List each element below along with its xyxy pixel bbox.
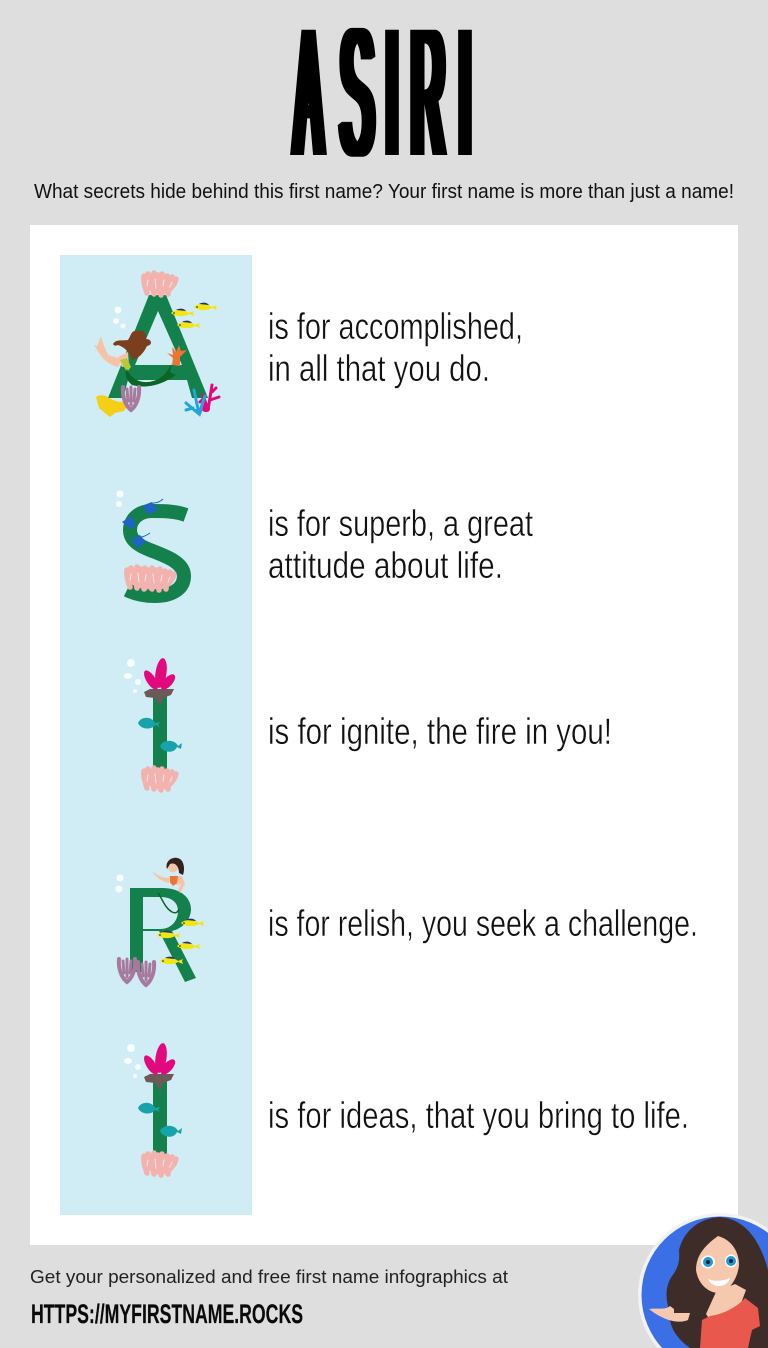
text: S line: is for superb, a great (268, 503, 534, 544)
text: S line (268, 503, 534, 586)
footer text: Get your personalized and free first name infographics at (30, 1266, 508, 1287)
panel: white card (30, 225, 738, 1245)
icon: letter S with blue fish and coral (116, 490, 186, 596)
panel: light blue letter strip (60, 255, 252, 1215)
icon: letter I with fountain and teal fish (124, 657, 182, 790)
text: S line: attitude about life. (268, 545, 503, 586)
title (295, 0, 470, 194)
text: A line: is for accomplished, (268, 306, 523, 347)
icon: letter R with mermaid, yellow fish and coral (116, 858, 204, 985)
icon: avatar in blue circle (638, 1213, 768, 1348)
subtitle: What secrets hide behind this first name? Your first name is more than just a name! (34, 181, 734, 203)
footer url: HTTPS://MYFIRSTNAME.ROCKS (31, 1299, 303, 1329)
icon: letter A with mermaid and coral (94, 273, 219, 417)
text: A line: in all that you do. (268, 348, 490, 389)
icon: second letter I with fountain and teal fish (124, 1042, 182, 1175)
text: A line (268, 306, 523, 389)
text: I line: is for ignite, the fire in you! (268, 711, 612, 752)
